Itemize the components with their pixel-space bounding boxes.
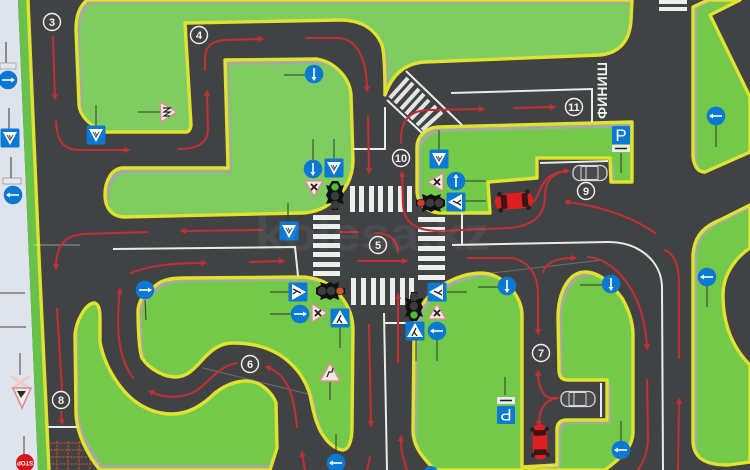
sign: circle down 3 bbox=[498, 277, 516, 295]
number 5 bbox=[370, 236, 386, 254]
sign: parking upside down: P bbox=[500, 405, 512, 424]
number 10: 10 bbox=[395, 153, 407, 165]
sign: parking plate bbox=[612, 145, 630, 152]
sign: pedestrian square right bbox=[428, 282, 446, 302]
number 5: 5 bbox=[375, 240, 381, 252]
sign: yield square 1 bbox=[86, 126, 106, 144]
sign: zigzag triangle right bbox=[160, 102, 177, 122]
green island: parking block bbox=[417, 122, 636, 218]
number 8: 8 bbox=[58, 395, 64, 407]
sign: triangle x top bbox=[305, 181, 323, 196]
number 4: 4 bbox=[196, 30, 203, 42]
sign: circle left lower bbox=[612, 441, 630, 459]
green island: curved upper bbox=[138, 277, 357, 454]
sign: parking bbox=[612, 126, 630, 145]
sign: left plate 2 bbox=[3, 178, 21, 184]
sign: circle left bottom bbox=[327, 454, 345, 470]
sign: circle down 1 bbox=[305, 65, 323, 83]
red car right bbox=[494, 189, 534, 213]
roadside yellow edge bbox=[28, 0, 49, 470]
sign: right circle left arrow upper bbox=[707, 107, 725, 125]
railway crossing bbox=[49, 441, 100, 470]
traffic light top-left bbox=[326, 181, 344, 210]
number 9: 9 bbox=[583, 186, 589, 198]
traffic light top-right bbox=[416, 194, 445, 212]
sign: pedestrian square bbox=[446, 192, 466, 212]
sign: left circle right arrow bbox=[0, 71, 17, 89]
number 4 bbox=[190, 26, 208, 44]
diagonal crosswalk bbox=[390, 78, 442, 130]
number 6 bbox=[242, 356, 258, 372]
sign: zigzag triangle up bbox=[320, 363, 340, 381]
number 6: 6 bbox=[247, 359, 253, 371]
parked white car lower bbox=[561, 392, 595, 406]
sign: railway cross bbox=[11, 376, 30, 389]
number 11 bbox=[566, 98, 582, 116]
sign: circle up bbox=[447, 172, 465, 190]
sign: yield square 3 bbox=[280, 222, 298, 240]
panel: left margin bbox=[0, 0, 38, 470]
sign: left yield square bbox=[0, 128, 20, 148]
number 10 bbox=[392, 150, 410, 166]
sign: stop: STOP bbox=[17, 459, 33, 465]
sign: triangle x up bbox=[428, 304, 446, 319]
sign: pedestrian square centre bbox=[406, 322, 424, 340]
sign: yield square 4 bbox=[430, 150, 448, 168]
sign: circle down 4 bbox=[602, 275, 620, 293]
green island: top large bbox=[76, 0, 636, 136]
sign: triangle x left bbox=[428, 173, 443, 191]
sign: circle right lower bbox=[291, 305, 309, 323]
watermark: kolesa.kz bbox=[255, 208, 490, 260]
number 7 bbox=[532, 344, 550, 362]
sign: circle right lower left bbox=[136, 281, 154, 299]
number 7: 7 bbox=[538, 348, 544, 360]
road markings bbox=[33, 71, 663, 470]
sign: parking plate lower bbox=[497, 397, 515, 404]
number 8 bbox=[52, 392, 70, 408]
number 11: 11 bbox=[568, 102, 580, 114]
green island: curved lower bbox=[75, 298, 280, 470]
sign: parking upside down bbox=[497, 405, 515, 424]
sign: railway triangle bbox=[13, 388, 31, 408]
traffic light bottom-right bbox=[405, 292, 423, 321]
traffic light bottom-left bbox=[316, 282, 345, 300]
green island: bottom centre bbox=[413, 272, 637, 470]
red direction arrows bbox=[53, 37, 679, 470]
green island: right lower bbox=[693, 205, 750, 467]
crosswalks bbox=[313, 0, 687, 305]
sign: triangle x right bbox=[312, 304, 327, 322]
red car bottom bbox=[530, 424, 550, 460]
roadside green strip bbox=[18, 0, 49, 470]
number 3: 3 bbox=[49, 17, 55, 29]
sign: circle left right side bbox=[698, 268, 716, 286]
sign: partial circle at bottom edge bbox=[424, 466, 438, 470]
sign: left plate 1 bbox=[0, 63, 16, 69]
sign: pedestrian square lower bbox=[288, 282, 308, 302]
sign: circle left centre bbox=[428, 322, 446, 340]
green island: middle bbox=[105, 59, 357, 222]
sign: left circle arrow bbox=[4, 186, 22, 204]
sign: stop bbox=[16, 454, 34, 470]
sign: pedestrian square lower right bbox=[330, 308, 350, 328]
sign: parking: P bbox=[615, 126, 627, 145]
sign: circle down 2 bbox=[304, 160, 322, 178]
green island: right upper bbox=[693, 0, 750, 174]
number 3 bbox=[44, 14, 60, 30]
number 9 bbox=[578, 182, 594, 200]
sign: yield square 2 bbox=[324, 158, 344, 178]
finish label: ФИНИШ bbox=[594, 62, 610, 119]
parked white car upper bbox=[573, 166, 607, 180]
